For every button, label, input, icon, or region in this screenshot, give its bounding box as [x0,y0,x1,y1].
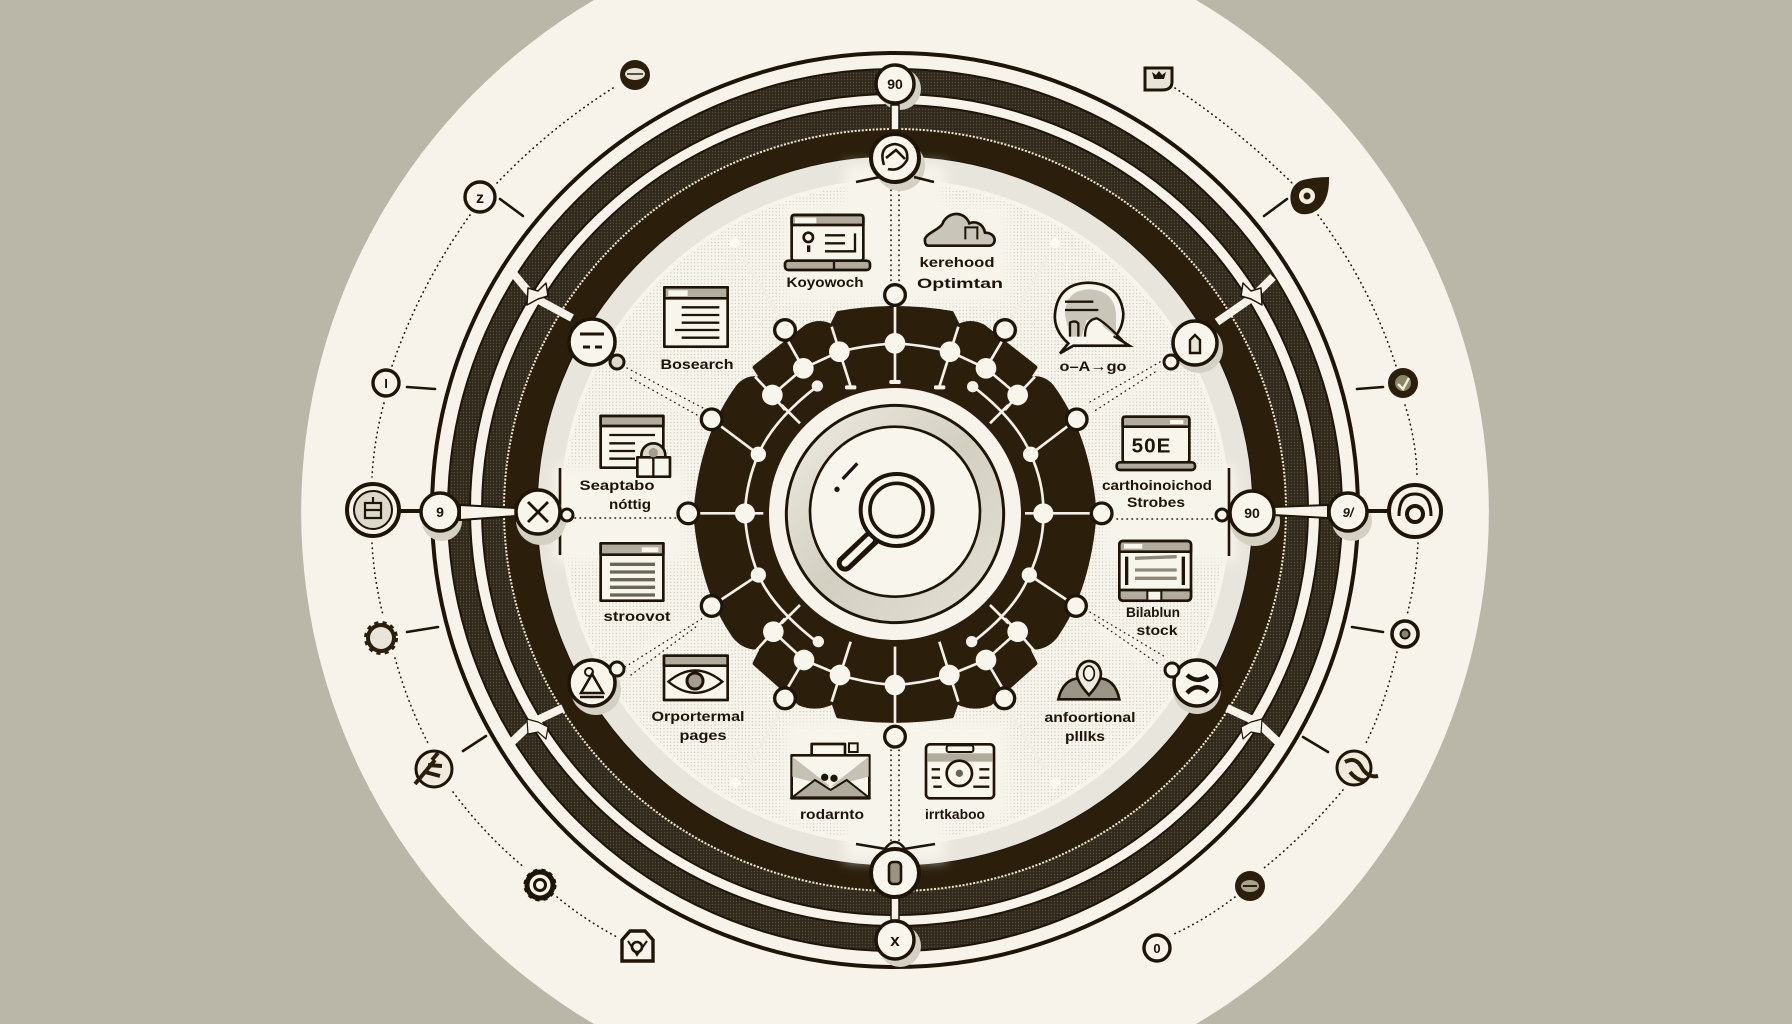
node: right number [1329,493,1367,531]
icon: right target [1389,485,1441,537]
panel: sitemap: nóttig [609,496,651,512]
label: optimisation: kerehood [920,254,994,270]
panel: bilablun stock: stock [1136,622,1178,638]
icon: left badge [347,484,399,536]
label: bilablun stock: Bilablun [1126,604,1180,620]
label: rodarnto: rodarnto [800,806,864,822]
icon: cloud [925,214,995,246]
label: research: Bosearch [660,356,734,372]
panel: operational pages [652,656,744,743]
hub outer nodes [678,285,1112,747]
label: irrtkaboo: irrtkaboo [925,806,985,822]
panel: keyword [785,215,870,290]
node: upper-right [1164,321,1217,369]
outer icon: z badge: z [476,190,484,207]
panel: operational pages: pages [680,727,727,743]
outer icon: flower right [1235,871,1265,901]
icon: bilablun browser [1119,541,1191,601]
outer icon: envelope [622,931,653,961]
node: top number [876,65,914,103]
label: on-page: o–A→go [1060,358,1126,374]
panel: structure [601,543,671,624]
panel: irrtkaboo [925,744,994,822]
panel: informational pillars: plllks [1065,728,1105,744]
node: bottom icon [871,849,919,897]
concentric rings [432,53,1358,967]
node: bottom x [876,921,914,959]
large cream circle [301,0,1489,1024]
node: bottom x: x [890,931,900,950]
icon: structure browser [601,543,663,601]
icon: envelope case [792,743,869,798]
node: lower-right [1165,660,1220,706]
outer icon: right lower badge [1392,621,1418,647]
node: left number: 9 [436,504,444,520]
outer icon: gear [366,623,396,653]
node: top number: 90 [887,76,903,92]
diagonal connectors [512,273,1278,742]
node: right number 90 [1216,491,1274,535]
icon: research browser [664,287,728,347]
shadows behind nodes [422,68,1372,967]
hub link end caps [812,380,978,647]
outer icon: right upper badge [1388,368,1418,398]
outer icon: i badge: I [384,376,388,391]
label: keyword: Koyowoch [786,274,864,290]
outer icon: i badge [373,370,399,396]
node: lower-left [569,660,624,706]
panel: on-page [1055,283,1129,374]
node: right number: 9/ [1343,505,1355,520]
panel: optimisation: Optimtan [917,275,1003,291]
label: structure: stroovot [604,608,671,624]
label: sitemap: Seaptabo [580,477,654,493]
panel: bilablun stock [1119,541,1191,638]
icon: camera card [926,744,994,798]
stippled inner field [555,165,1236,860]
icon: keyword laptop [785,215,870,270]
outer icon: zero badge: 0 [1153,941,1161,956]
vertical and horizontal connectors [400,105,1388,920]
node: left number [421,493,459,531]
panel: structured strobes [1102,417,1212,510]
orbit tick marks [407,199,1383,752]
node: top icon [871,134,919,182]
icon: magnifying glass [834,463,933,563]
sector dividers [560,170,1229,860]
outer icon: square badge [1145,68,1172,90]
node: right number 90: 90 [1244,505,1260,521]
panel: informational pillars [1044,661,1136,744]
icon: eye browser [664,656,728,700]
hub dark segmented disc [696,308,1094,720]
icon: person pin [1058,661,1119,699]
hub link lines [688,295,1102,737]
outer icon: flower left [525,870,555,900]
outer icon: eye [620,60,650,90]
hub inner nodes [735,333,1053,695]
icon: chat bubble [1055,283,1129,353]
panel: sitemap [580,416,670,512]
icon: sitemap browser with lock [601,416,670,477]
label: structured strobes: carthoinoichod [1102,477,1212,493]
panel: rodarnto [792,743,869,822]
label: operational pages: Orportermal [652,708,744,724]
central hub [678,285,1112,747]
outer icon: z badge [465,182,495,212]
icon: laptop 50E: 50E [1132,435,1171,458]
outer icon: zero badge [1144,935,1170,961]
outer dotted orbit [372,88,1418,937]
panel: research [660,287,734,372]
outer icon: branch right [1337,751,1378,785]
panel: optimisation [917,214,1003,291]
node: upper-left [569,319,624,369]
panel: structured strobes: Strobes [1127,494,1185,510]
central dial [769,388,1021,640]
outer icon: branch left [415,751,452,787]
label: informational pillars: anfoortional [1044,709,1136,725]
outer icon: drop [1290,177,1329,214]
node: left cross [516,490,573,534]
